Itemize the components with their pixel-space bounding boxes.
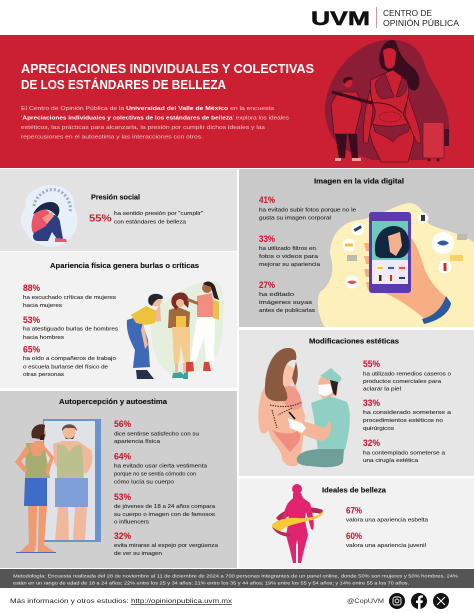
stat: 55%: productos comerciales para (363, 379, 442, 385)
stat: 64% (114, 452, 208, 486)
stat: 33%: procedimientos estéticos no (363, 418, 444, 424)
stat: 60%: 60% (346, 531, 362, 541)
stat: 32%: 32% (363, 438, 380, 448)
intro text: ‘Apreciaciones individuales y colectivas de los estándares de belleza ’ explora los ideales (21, 116, 289, 122)
stat: 32%: 32% (114, 531, 131, 541)
stat: 27% (259, 280, 315, 314)
illustration: silhouette with measuring tape (272, 484, 323, 563)
stat: 67%: valora una apariencia esbelta (346, 518, 429, 524)
stat: 67%: 67% (346, 506, 362, 516)
stat: 41%: ha evitado subir fotos porque no le (259, 208, 357, 214)
stat: 32%: de ver su imagen (114, 551, 162, 557)
stat: 32%: evita mirarse al espejo por vergüenza (114, 543, 219, 549)
heading: Presión social (91, 192, 140, 202)
stat: 33%: mejorar su apariencia (259, 262, 321, 268)
stat: 56% (114, 419, 199, 445)
panel: autopercepción y autoestima (0, 391, 237, 568)
intro text: estéticos, las prácticas para alcanzarla, la presión por cumplir dichos ideales y las (21, 125, 265, 131)
stat: 33% (363, 398, 452, 432)
logo: UVM Centro de Opinión Pública: UVM (311, 8, 370, 30)
methodology bar: Metodología: Encuesta realizada del 28 de noviembre al 11 de diciembre de 2024 a 700 personas integrantes de un panel online, donde 50% son mujeres y 50% hombres. 24% (13, 574, 458, 578)
icon: instagram (389, 593, 405, 609)
illustration: woman and doctor with laser (325, 40, 449, 162)
panel: ideales de belleza (239, 478, 474, 568)
panel: presión social (0, 169, 237, 251)
stat: 53%: 53% (114, 492, 131, 502)
stat: 33%: 33% (363, 398, 380, 408)
stat: 64%: porque no se sentía cómodo con (114, 472, 196, 478)
stat: 41% (259, 195, 357, 222)
stat: 65%: otras personas (23, 372, 64, 378)
stat: 53%: 53% (23, 315, 40, 325)
stat: 88%: 88% (23, 283, 40, 293)
icon: facebook (411, 593, 427, 609)
social handle: @CopUVM (347, 598, 384, 605)
panel: imagen en la vida digital (239, 169, 474, 327)
panel: modificaciones estéticas (239, 330, 474, 476)
stat: 56%: 56% (114, 419, 131, 429)
stat: 32%: ha contemplado someterse a (363, 450, 446, 456)
illustration: surgeon marking patient (258, 348, 350, 467)
stat: 65%: 65% (23, 344, 40, 354)
stat: 56%: apariencia física (114, 439, 161, 445)
stat: 65% (23, 344, 117, 378)
illustration: distressed woman (21, 185, 78, 247)
stat: 67% (346, 506, 429, 524)
stat: 60% (346, 531, 426, 549)
stat: 33%: 33% (259, 234, 275, 244)
panel: header banner (0, 35, 474, 168)
stat: 88%: ha escuchado críticas de mujeres (23, 295, 116, 301)
stat: 60%: valora una apariencia juvenil (346, 543, 426, 549)
stat: 53%: su cuerpo o imagen con de famosos (114, 512, 215, 518)
stat: 65%: o escuela burlarse del físico de (23, 364, 109, 370)
title (21, 61, 314, 92)
heading: Autopercepción y autoestima (59, 397, 168, 406)
stat: 55%: ha sentido presión por “cumplir” (114, 211, 203, 217)
stat: 55%: 55% (363, 359, 380, 369)
intro text (21, 106, 289, 141)
stat: 55% (363, 359, 452, 392)
logo: UVM Centro de Opinión Pública: OPINIÓN PÚBLICA (383, 18, 459, 28)
stat: 41%: 41% (259, 195, 275, 205)
stat: 27%: ha editado (259, 292, 295, 298)
stat: 55%: 55% (89, 212, 112, 224)
stat: 56%: dice sentirse satisfecho con su (114, 432, 199, 438)
stat: 53%: de jóvenes de 18 a 24 años compara (114, 504, 216, 510)
stat: 55% (89, 211, 203, 226)
stat: 88% (23, 283, 116, 309)
methodology bar (0, 569, 474, 588)
footer link: Más información y otros estudios: http://opinionpublica.uvm.mx (10, 598, 233, 605)
illustration: phone with beauty filters (318, 203, 474, 327)
stat: 64%: cómo lucía su cuerpo (114, 480, 175, 486)
stat: 27%: imágenes suyas (259, 300, 312, 306)
stat: 88%: hacia mujeres (23, 303, 62, 309)
stat: 32% (114, 531, 219, 557)
title: DE LOS ESTÁNDARES DE BELLEZA (21, 77, 226, 92)
methodology bar: están en un rango de edad de 18 a 24 años; 22% entre los 25 y 34 años; 21% entre los 35 y 44 años; 19% entre los 55 y 54 años; y 14% entre 55 a los 70 años. (13, 580, 409, 586)
heading: Ideales de belleza (322, 486, 387, 494)
stat: 53%: ha atestiguado burlas de hombres (23, 326, 118, 332)
title: APRECIACIONES INDIVIDUALES Y COLECTIVAS (21, 61, 314, 76)
intro text: repercusiones en el autoestima y las interacciones con otros. (21, 135, 203, 141)
stat: 33% (259, 234, 321, 268)
stat: 27%: 27% (259, 280, 275, 290)
illustration: man looking in mirror (15, 419, 101, 553)
illustration: three women gossiping (127, 281, 224, 379)
heading: Apariencia física genera burlas o críticas (50, 261, 199, 270)
stat: 53% (23, 315, 118, 341)
logo: UVM Centro de Opinión Pública (311, 7, 459, 30)
icon: X (433, 593, 449, 609)
logo: UVM Centro de Opinión Pública: CENTRO DE (383, 8, 432, 18)
intro text: El Centro de Opinión Pública de la Universidad del Valle de México en la encuesta (21, 106, 274, 112)
stat: 53% (114, 492, 216, 526)
stat: 33%: fotos o videos para (259, 254, 319, 260)
stat: 65%: ha oído a compañeros de trabajo (23, 356, 117, 362)
stat: 64%: ha evitado usar cierta vestimenta (114, 464, 208, 470)
stat: 53%: o influencers (114, 520, 149, 526)
stat: 32%: una cirugía estética (363, 458, 419, 464)
stat: 33%: ha considerado someterse a (363, 410, 452, 416)
panel: apariencia física (0, 252, 237, 388)
stat: 55%: aclarar la piel (363, 386, 401, 392)
stat: 33%: quirúrgicos (363, 426, 394, 432)
heading: Modificaciones estéticas (309, 336, 399, 346)
stat: 64%: 64% (114, 452, 131, 462)
stat: 41%: gusta su imagen corporal (259, 216, 331, 222)
stat: 55%: ha utilizado remedios caseros o (363, 372, 452, 378)
stat: 55%: con estándares de belleza (114, 220, 187, 226)
stat: 33%: ha utilizado filtros en (259, 246, 316, 252)
stat: 27%: antes de publicarlas (259, 308, 315, 314)
heading: Imagen en la vida digital (314, 176, 404, 186)
stat: 32% (363, 438, 446, 464)
stat: 53%: hacia hombres (23, 335, 64, 341)
